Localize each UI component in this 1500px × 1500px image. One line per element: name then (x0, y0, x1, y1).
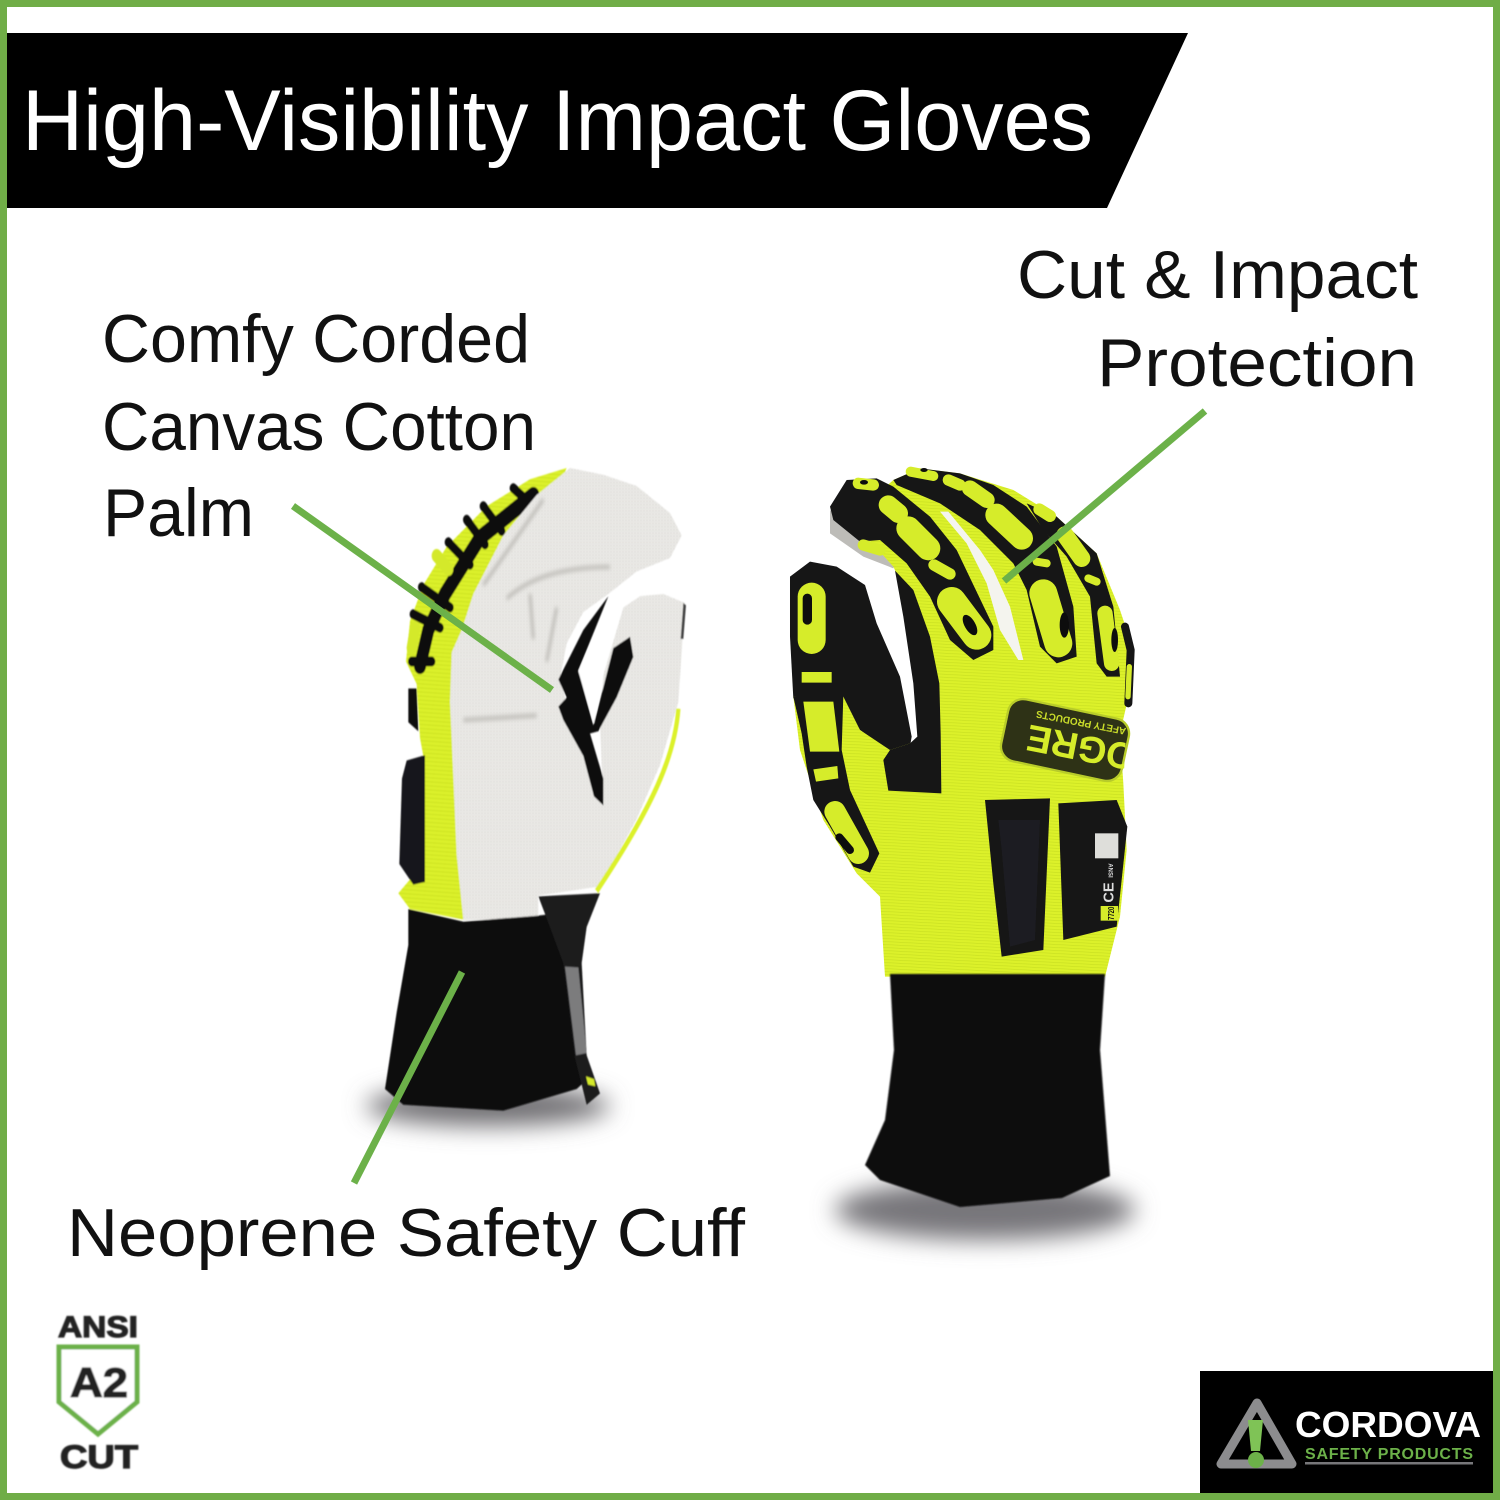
middle pill hole (1060, 612, 1069, 638)
QR block (1095, 833, 1118, 858)
left glove: palm view (385, 468, 686, 1111)
fingertip palm peek (830, 510, 897, 568)
callout: cut and impact protection (1017, 237, 1418, 401)
right glove: back view (790, 468, 1139, 977)
ring pill hole (1111, 628, 1118, 652)
inner palm webbing (883, 571, 941, 793)
side impact pad (399, 755, 425, 885)
model number text: 7720 (1107, 906, 1116, 920)
callout line three: Palm (103, 475, 254, 551)
index tip hole (860, 480, 868, 485)
glove back in hi-vis yellow (398, 468, 567, 920)
finger guards: ring finger (1027, 503, 1120, 677)
pointer line: palm (293, 506, 552, 690)
palm fold shading (463, 500, 610, 720)
A2 grade: A2 (70, 1359, 128, 1406)
thumb long block (803, 702, 839, 752)
tagline: SAFETY PRODUCTS (1305, 1446, 1473, 1463)
thumb short bar (802, 661, 832, 693)
exclamation bar (1248, 1420, 1263, 1451)
thumb lower pill (835, 812, 858, 853)
CE mark: CE (1101, 882, 1117, 903)
warning triangle (1221, 1403, 1292, 1464)
yellow rubber blocks on finger (412, 556, 448, 648)
callout line one: Cut & Impact (1017, 237, 1418, 313)
ring blocks (1039, 509, 1050, 516)
pointer line: protection (1004, 411, 1205, 581)
CUT label: CUT (60, 1439, 139, 1475)
glove body in hi-vis yellow (793, 468, 1133, 977)
ANSI label: ANSI (58, 1311, 138, 1344)
thumb pill hole (793, 598, 821, 620)
shadow: left glove (366, 1086, 610, 1126)
finger guards: middle finger (893, 468, 1077, 663)
patch wordmark (1026, 711, 1126, 769)
logo background (1200, 1371, 1493, 1493)
OGRE text: OGRE (1023, 717, 1139, 779)
thumb tip edge (681, 603, 686, 639)
shadow: right glove (835, 1180, 1135, 1240)
exclamation dot (1248, 1452, 1264, 1468)
knuckle clip (408, 688, 418, 731)
callout line two: Protection (1097, 325, 1417, 401)
cuff closure strap (538, 893, 600, 1105)
thumb lower pill hole (839, 837, 850, 850)
OGRE logo patch (1000, 698, 1130, 782)
finger guards: index finger (830, 478, 993, 660)
wrist impact pad two (1058, 800, 1127, 940)
corded canvas palm (450, 468, 685, 920)
index pill hole (960, 613, 980, 637)
reflective strip (565, 967, 587, 1055)
title: High-Visibility Impact Gloves (22, 73, 1093, 169)
white inset strip between fingers (940, 512, 1023, 660)
shield (59, 1347, 137, 1434)
size text: ANSI (1106, 863, 1112, 878)
callout: neoprene cuff: Neoprene Safety Cuff (67, 1195, 745, 1271)
white gap between thumb and fingers (578, 603, 623, 724)
index black track (830, 478, 993, 660)
pad two printed label (1095, 833, 1118, 921)
ANSI A2 cut badge (58, 1311, 139, 1475)
ring black track (1027, 503, 1120, 677)
wrist impact pad one (985, 798, 1050, 957)
rubber ribs along finger backs (412, 488, 533, 666)
patch plate (998, 696, 1132, 784)
index blocks (858, 483, 880, 550)
pointer line: cuff (354, 972, 462, 1183)
callout line one: Comfy Corded (102, 301, 530, 377)
middle blocks (911, 472, 933, 476)
title banner (7, 33, 1188, 208)
thumb lower black guard (793, 695, 879, 873)
patch small text: SAFETY PRODUCTS (1035, 708, 1134, 737)
right glove neoprene cuff (865, 974, 1110, 1207)
middle black track (893, 468, 1077, 663)
CORDOVA wordmark: CORDOVA (1295, 1404, 1481, 1445)
callout line two: Canvas Cotton (102, 389, 536, 465)
callout: palm (102, 301, 536, 551)
tagline underline (1305, 1462, 1473, 1464)
yellow edge on thumb side (597, 709, 678, 891)
thumb upper pill (770, 597, 854, 640)
thumb small block (813, 766, 838, 782)
middle tip hole (920, 468, 928, 472)
neoprene cuff (385, 909, 587, 1111)
pad one facet (998, 820, 1040, 947)
black reinforcement between thumb and fingers (558, 596, 633, 806)
model number on yellow (1101, 906, 1118, 921)
thumb webbing in black (790, 562, 912, 752)
yellow strap tab (586, 1076, 595, 1086)
thumb rubber guards (793, 597, 879, 873)
Cordova logo (1200, 1371, 1493, 1493)
finger guards: little finger edge (1125, 627, 1131, 703)
